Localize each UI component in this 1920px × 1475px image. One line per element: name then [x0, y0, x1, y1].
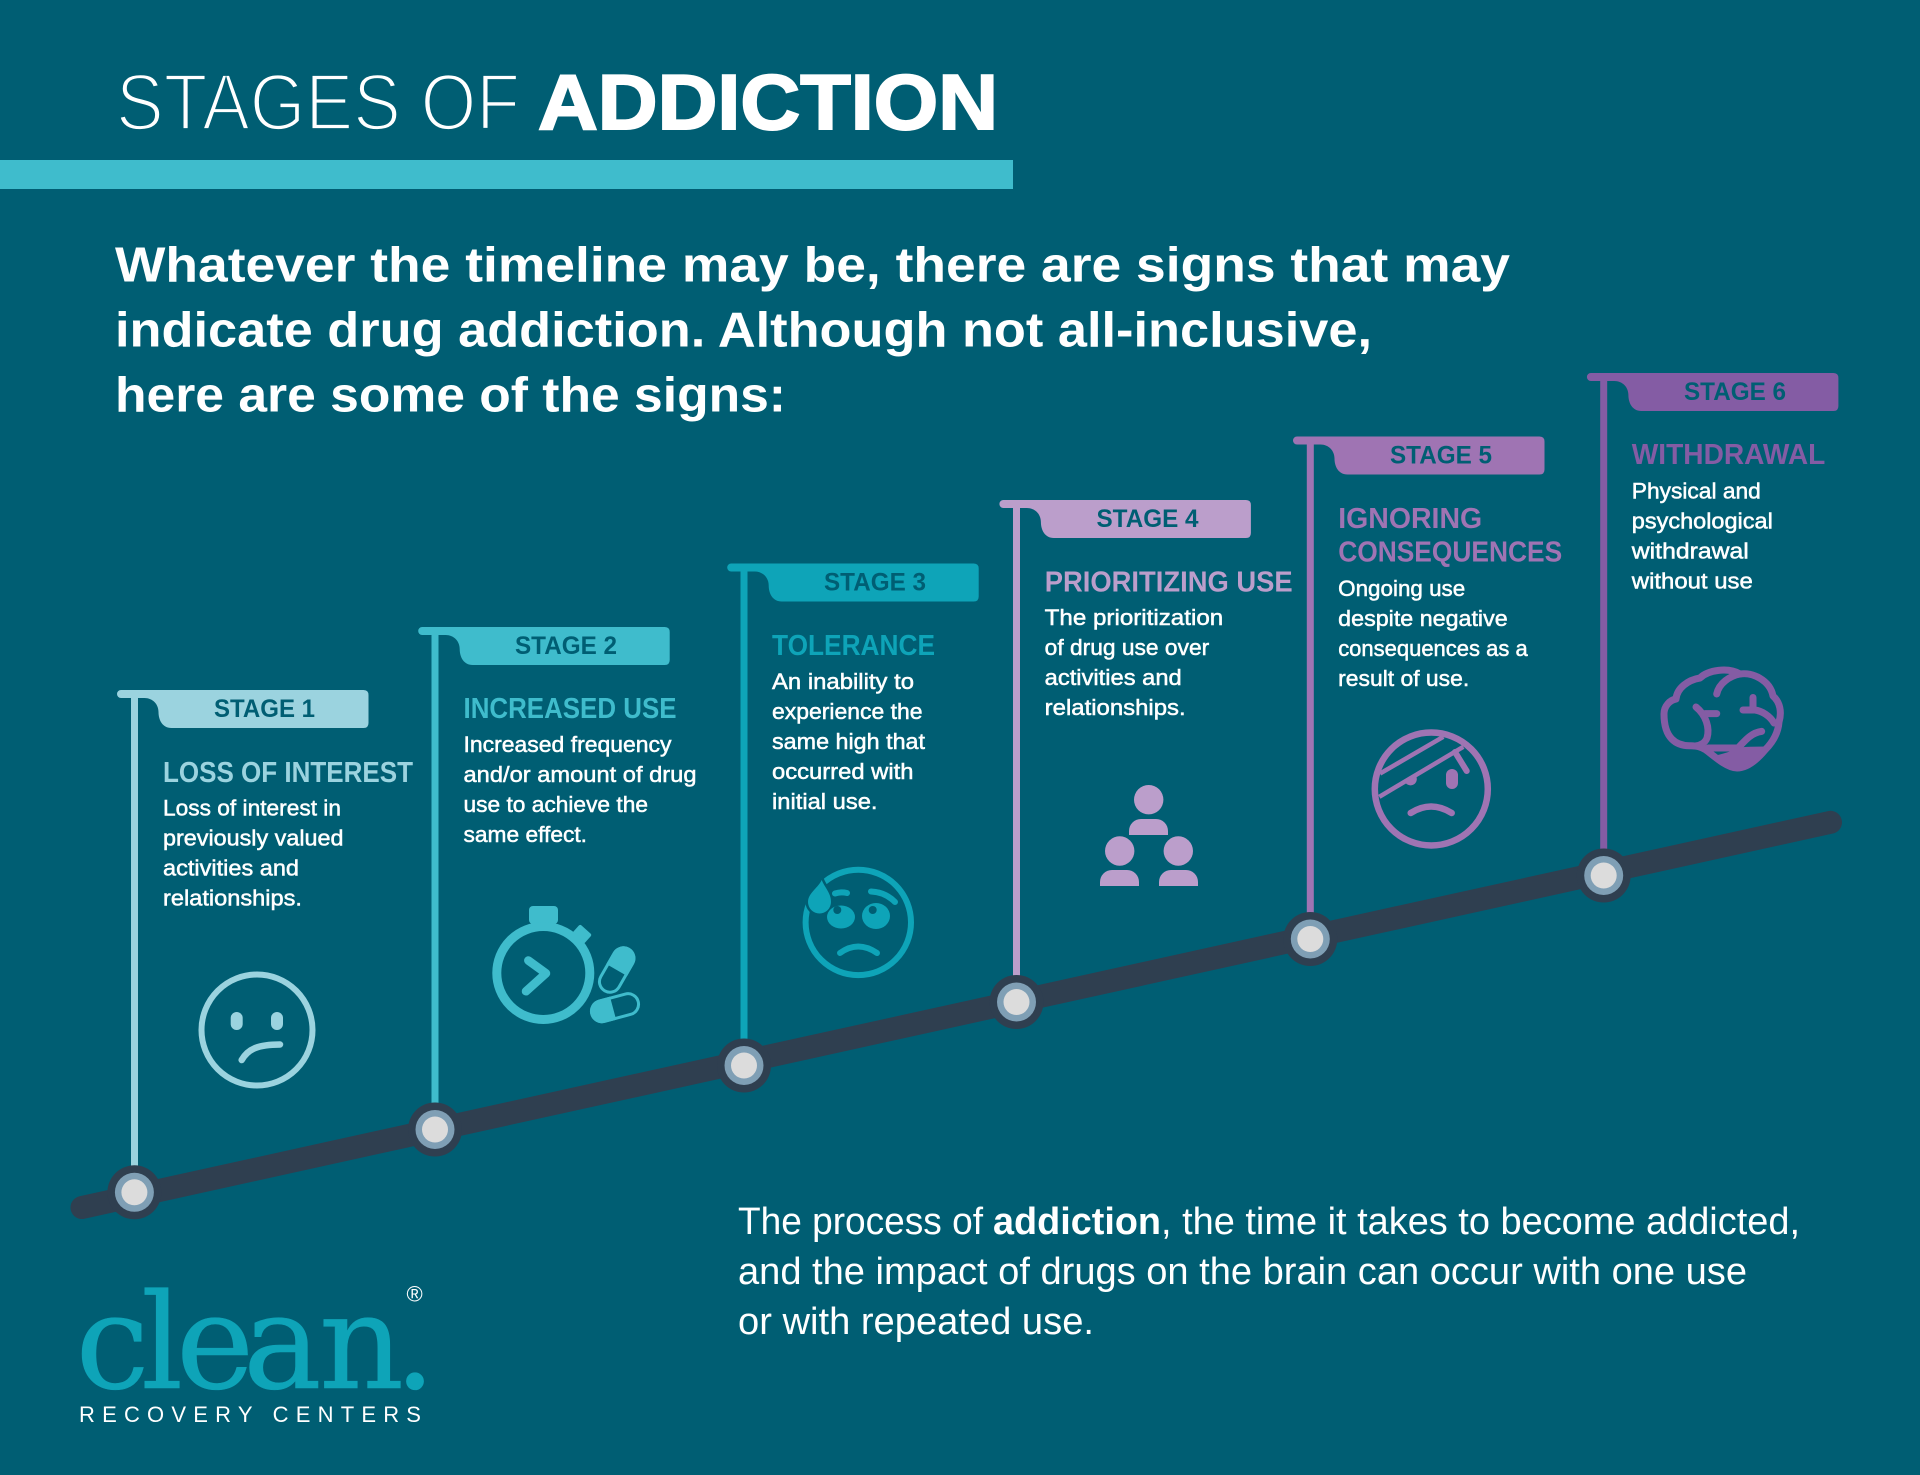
icon: brain	[1664, 670, 1780, 768]
stage 1 description: Loss of interest in	[163, 796, 341, 820]
title underline bar	[0, 160, 1013, 189]
stage 4 description	[1045, 605, 1223, 720]
timeline line	[82, 822, 1830, 1208]
stage 5 description	[1338, 576, 1528, 691]
stage 3 description	[772, 669, 925, 814]
stage 1 description: relationships.	[163, 886, 302, 910]
stage 6 description	[1631, 478, 1773, 594]
panel: stage 4	[990, 500, 1293, 1029]
stage 1 heading: LOSS OF INTEREST	[163, 757, 413, 789]
title: ADDICTION	[538, 58, 998, 146]
stage 4 label: STAGE 4	[1096, 505, 1199, 533]
stage 5 heading: CONSEQUENCES	[1338, 536, 1562, 568]
stage 6 description: Physical and	[1632, 478, 1761, 504]
stage 2 flag	[418, 627, 670, 665]
stage 5 heading	[1338, 503, 1562, 568]
icon: stopwatch and pills	[497, 906, 641, 1026]
stage 3 flag	[727, 564, 979, 602]
intro text: Whatever the timeline may be, there are signs that may	[115, 238, 1510, 292]
stage 5 description: result of use.	[1338, 666, 1469, 691]
stage 4 flag	[999, 500, 1251, 538]
stage 1 description: activities and	[163, 856, 299, 880]
stage 3 description: same high that	[772, 729, 925, 754]
stage 6 description: psychological	[1632, 508, 1773, 534]
stage 2 node	[408, 1102, 462, 1156]
stage 4 description: of drug use over	[1045, 635, 1209, 660]
icon: three people	[1100, 785, 1198, 886]
stage 4 description: The prioritization	[1045, 605, 1223, 630]
stage 5 flag	[1293, 436, 1544, 474]
stage 5 node	[1283, 912, 1337, 966]
stage 6 pole	[1600, 378, 1607, 858]
panel: stage 6	[1577, 373, 1838, 902]
stage 6 label: STAGE 6	[1684, 378, 1786, 406]
stage 2 description	[464, 732, 696, 847]
stage 2 pole	[432, 632, 438, 1112]
stage 6 flag	[1587, 373, 1838, 411]
title: STAGES OF	[116, 58, 520, 146]
closing text block: or with repeated use.	[738, 1301, 1094, 1343]
logo: clean recovery centers: clean.	[76, 1266, 436, 1420]
logo: clean recovery centers: ®	[406, 1282, 423, 1306]
closing text block: addiction	[993, 1201, 1161, 1243]
stage 3 description: initial use.	[772, 789, 878, 814]
stage 2 label: STAGE 2	[515, 632, 617, 660]
stage 2 heading: INCREASED USE	[464, 693, 676, 725]
stage 2 description: use to achieve the	[464, 792, 648, 817]
stage 6 description: withdrawal	[1631, 538, 1749, 564]
stage 4 pole	[1013, 505, 1020, 985]
stage 4 node	[990, 975, 1044, 1029]
closing text block: The process of	[738, 1201, 983, 1243]
panel: stage 3	[717, 564, 979, 1092]
stage 1 flag	[117, 690, 368, 728]
panel: stage 2	[408, 627, 696, 1156]
panel: stage 5	[1283, 436, 1562, 966]
intro text: here are some of the signs:	[115, 368, 786, 422]
stage 3 pole	[740, 568, 748, 1048]
panel: stage 1	[107, 690, 413, 1219]
icon: bandaged face	[1375, 732, 1488, 846]
stage 1 description	[163, 796, 344, 910]
stage 3 heading: TOLERANCE	[772, 630, 935, 662]
stage 6 node	[1577, 848, 1631, 902]
stage 1 label: STAGE 1	[214, 695, 315, 723]
icon: sweating worried face	[806, 870, 911, 975]
stage 4 description: activities and	[1045, 665, 1182, 690]
title	[116, 58, 998, 146]
stage 1 pole	[131, 695, 138, 1175]
stage 5 label: STAGE 5	[1390, 442, 1492, 470]
stage 6 heading: WITHDRAWAL	[1632, 439, 1825, 471]
stage 1 description: previously valued	[163, 826, 344, 850]
stage 3 description: occurred with	[772, 759, 914, 784]
stage 5 pole	[1307, 441, 1314, 921]
stage 5 description: Ongoing use	[1338, 576, 1465, 601]
stage 4 description: relationships.	[1045, 695, 1186, 720]
stage 2 description: same effect.	[464, 822, 587, 847]
closing text block: and the impact of drugs on the brain can occur with one use	[738, 1251, 1747, 1293]
stage 3 description: experience the	[772, 699, 922, 724]
stage 2 description: and/or amount of drug	[464, 762, 696, 787]
stage 5 description: consequences as a	[1338, 636, 1528, 661]
intro text	[115, 238, 1510, 422]
stage 5 heading: IGNORING	[1338, 503, 1482, 535]
stage 6 description: without use	[1631, 568, 1753, 594]
stage 1 node	[107, 1165, 161, 1219]
logo: clean recovery centers: RECOVERY CENTERS	[79, 1402, 421, 1427]
intro text: indicate drug addiction. Although not all-inclusive,	[115, 304, 1372, 358]
stage 3 node	[717, 1038, 771, 1092]
stage 2 description: Increased frequency	[464, 732, 672, 757]
closing text block	[738, 1201, 1800, 1343]
icon: confused face	[202, 974, 312, 1086]
stage 5 description: despite negative	[1338, 606, 1508, 631]
stage 3 label: STAGE 3	[824, 568, 926, 596]
stage 4 heading: PRIORITIZING USE	[1045, 566, 1293, 598]
closing text block: , the time it takes to become addicted,	[1161, 1201, 1800, 1243]
stage 3 description: An inability to	[772, 669, 914, 694]
